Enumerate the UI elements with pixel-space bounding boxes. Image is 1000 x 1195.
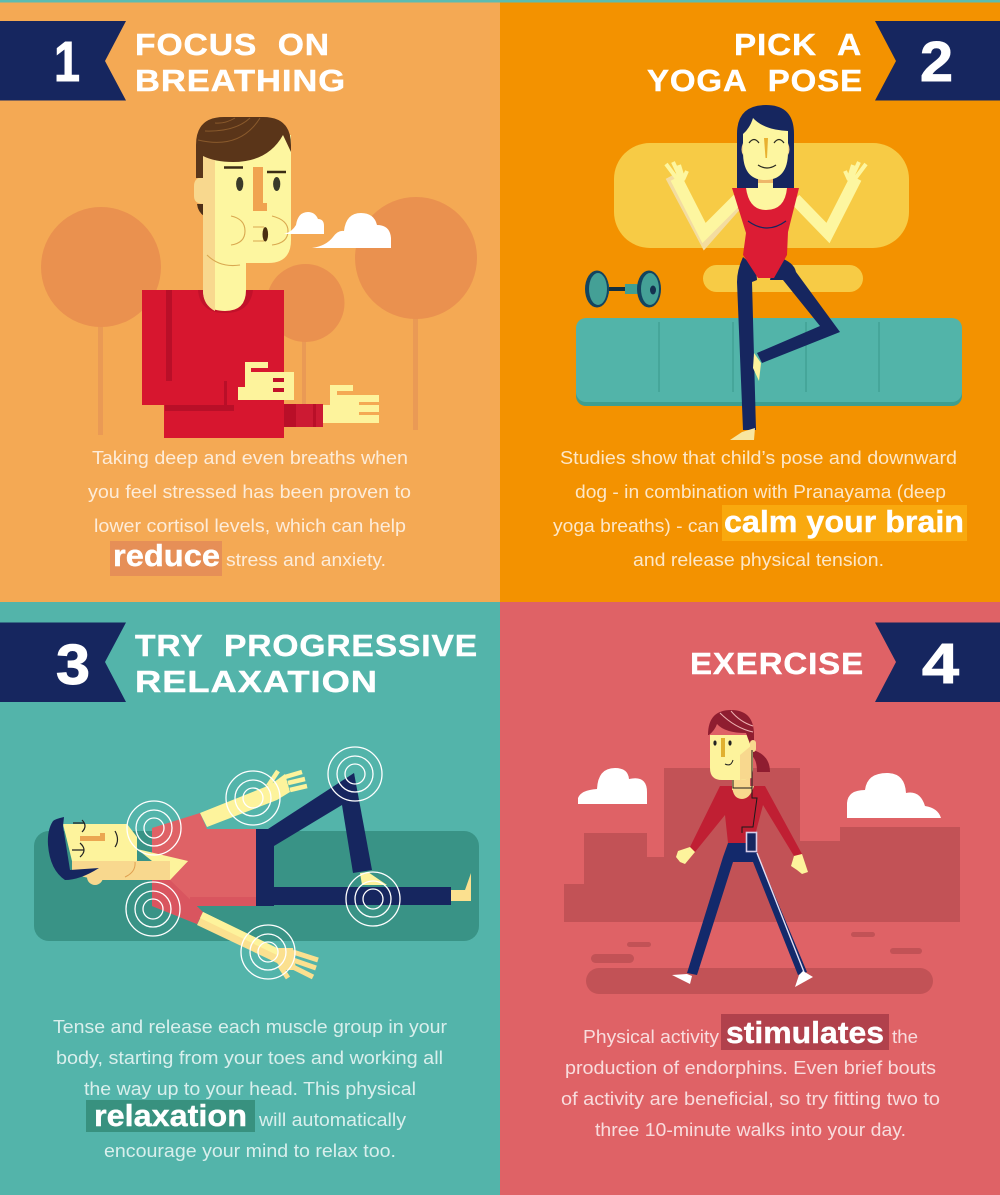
heading 3: TRY PROGRESSIVE xyxy=(135,629,478,663)
text block 3: the way up to your head. This physical xyxy=(84,1079,416,1099)
panel 2: pick a yoga pose xyxy=(500,0,1000,602)
yoga background shapes xyxy=(614,143,909,292)
panel 3: try progressive relaxation xyxy=(0,602,500,1195)
dumbbell xyxy=(585,270,661,308)
hands xyxy=(676,847,808,874)
text block 1: you feel stressed has been proven to xyxy=(88,482,411,502)
text block 1: stress and anxiety. xyxy=(226,550,386,570)
clouds xyxy=(578,768,941,818)
text block 2 xyxy=(553,448,967,570)
text block 3: body, starting from your toes and working all xyxy=(56,1048,443,1068)
text block 2: dog - in combination with Pranayama (deep xyxy=(575,482,946,502)
heading 1: FOCUS ON xyxy=(135,28,330,62)
text block 2: Studies show that child’s pose and downward xyxy=(560,448,957,468)
text block 3: will automatically xyxy=(258,1110,406,1130)
text block 3: encourage your mind to relax too. xyxy=(104,1141,396,1161)
torso and arms xyxy=(690,786,802,856)
arms xyxy=(666,162,866,240)
breath clouds xyxy=(284,212,391,248)
panel 1: focus on breathing xyxy=(0,0,500,602)
text block 1 xyxy=(88,448,411,576)
hair xyxy=(737,105,794,188)
trousers xyxy=(256,773,471,906)
heading 4: EXERCISE xyxy=(690,647,864,681)
text block 2: yoga breaths) - can xyxy=(553,516,719,536)
text block 1: Taking deep and even breaths when xyxy=(92,448,408,468)
highlight: stimulates: stimulates xyxy=(726,1015,884,1050)
banner 3 xyxy=(0,622,126,702)
text block 4: Physical activity xyxy=(583,1027,719,1047)
illustration: woman in tree pose xyxy=(666,105,866,440)
head xyxy=(48,817,188,885)
banner 2: 2 xyxy=(920,30,953,94)
shirt xyxy=(152,813,256,924)
banner 4: 4 xyxy=(922,632,959,696)
text block 4: of activity are beneficial, so try fitting two to xyxy=(561,1089,940,1109)
highlight: calm your brain: calm your brain xyxy=(724,504,964,539)
text block 1: lower cortisol levels, which can help xyxy=(94,516,406,536)
heading 1 xyxy=(135,28,346,98)
text block 4: the xyxy=(892,1027,918,1047)
man hands xyxy=(238,362,379,423)
legs xyxy=(730,257,840,440)
yoga mat xyxy=(576,318,962,406)
heading 3 xyxy=(135,629,478,699)
text block 3 xyxy=(53,1017,447,1161)
heading 2: YOGA POSE xyxy=(647,64,863,98)
leotard xyxy=(732,178,799,278)
banner 1: 1 xyxy=(54,30,80,94)
panel 4: exercise xyxy=(500,602,1000,1195)
man head xyxy=(194,117,291,311)
text block 4: three 10-minute walks into your day. xyxy=(595,1120,906,1140)
background trees xyxy=(41,197,477,435)
man torso xyxy=(142,290,323,438)
music player xyxy=(746,832,756,852)
mat xyxy=(34,831,479,941)
arms xyxy=(197,771,318,978)
text block 2: and release physical tension. xyxy=(633,550,884,570)
heading 1: BREATHING xyxy=(135,64,346,98)
city skyline xyxy=(564,768,960,922)
banner 1 xyxy=(0,21,126,100)
illustration: woman walking xyxy=(672,710,813,987)
heading 2 xyxy=(647,28,863,98)
heading 2: PICK A xyxy=(734,28,862,62)
text block 4: production of endorphins. Even brief bouts xyxy=(565,1058,936,1078)
head xyxy=(708,710,756,790)
heading 3: RELAXATION xyxy=(135,665,378,699)
ponytail xyxy=(752,750,770,772)
highlight: relaxation: relaxation xyxy=(94,1098,247,1133)
earphone wire xyxy=(733,750,757,833)
ground and dashes xyxy=(586,932,933,994)
banner 2 xyxy=(875,21,1000,100)
text block 3: Tense and release each muscle group in your xyxy=(53,1017,447,1037)
woman face xyxy=(742,118,790,183)
text block 4 xyxy=(561,1014,940,1140)
legs xyxy=(672,843,813,987)
tension rings xyxy=(126,747,400,979)
banner 3: 3 xyxy=(56,633,90,697)
illustration: man breathing xyxy=(142,117,391,438)
illustration: man lying down xyxy=(48,747,471,979)
banner 4 xyxy=(875,622,1000,702)
highlight: reduce: reduce xyxy=(113,538,220,573)
